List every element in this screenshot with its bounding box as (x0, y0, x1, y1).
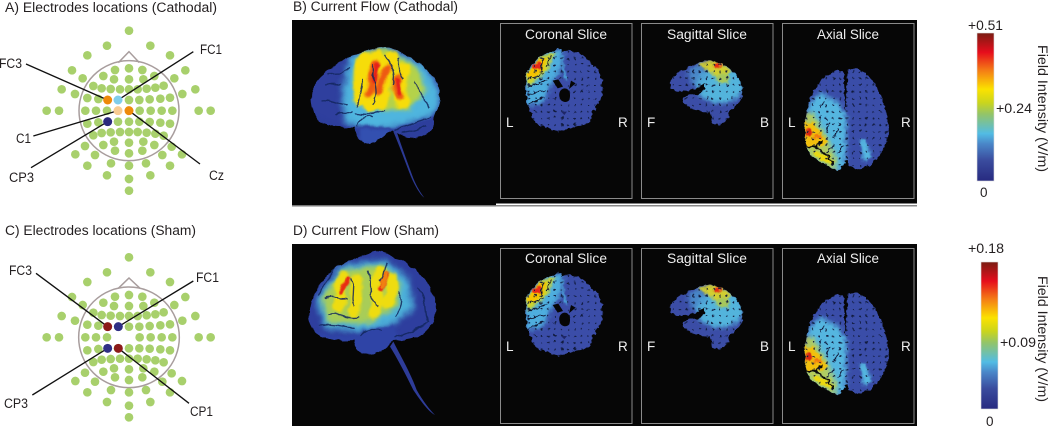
axial slice cathodal (782, 24, 914, 198)
electrode labels (4, 263, 219, 419)
axial slice sham (782, 248, 914, 424)
electrode labels: FC1 (200, 42, 222, 57)
coronal slice cathodal: L (506, 115, 514, 130)
sagittal slice sham: B (760, 339, 769, 354)
sagittal slice cathodal: F (647, 115, 655, 130)
scalp electrodes (42, 26, 215, 195)
sagittal slice cathodal: B (760, 115, 769, 130)
axial slice sham: L (788, 339, 796, 354)
coronal slice cathodal: Coronal Slice (525, 27, 607, 42)
electrode labels: Cz (209, 168, 224, 183)
electrode labels: C1 (16, 131, 31, 146)
stimulating electrodes (103, 95, 133, 126)
panel: current flow sham (292, 244, 917, 426)
head outline (79, 278, 179, 388)
electrode labels: CP1 (190, 404, 213, 419)
brain render cathodal (308, 45, 445, 198)
electrode labels: FC1 (196, 270, 219, 285)
electrode map: cathodal (0, 26, 224, 195)
panel: current flow cathodal (292, 20, 917, 206)
electrode map: sham (4, 253, 219, 422)
colour scale sham: +0.09 (1000, 335, 1036, 350)
coronal slice sham: L (506, 339, 514, 354)
electrode labels: CP3 (4, 396, 28, 411)
sagittal slice sham: Sagittal Slice (667, 251, 747, 266)
colour scale cathodal: +0.51 (968, 18, 1003, 33)
sagittal slice cathodal (642, 24, 773, 198)
stimulating electrodes (103, 322, 123, 353)
colour scale sham (968, 241, 1050, 427)
leader lines (26, 52, 200, 168)
coronal slice sham: Coronal Slice (525, 251, 607, 266)
axial slice cathodal: Axial Slice (817, 27, 879, 42)
sagittal slice cathodal: Sagittal Slice (667, 27, 747, 42)
colour scale sham: +0.18 (968, 241, 1004, 256)
colour scale cathodal: +0.24 (996, 101, 1033, 116)
panel title C: C) Electrodes locations (Sham) (5, 223, 196, 238)
scalp electrodes (42, 253, 215, 422)
colour scale cathodal: 0 (980, 185, 988, 200)
axial slice cathodal: R (901, 115, 911, 130)
panel title D: D) Current Flow (Sham) (293, 223, 439, 238)
coronal slice cathodal (500, 24, 632, 198)
colour scale sham: Field Intensity (V/m) (1035, 276, 1050, 402)
axial slice sham: Axial Slice (817, 251, 879, 266)
leader lines (32, 273, 193, 403)
colour scale cathodal: Field Intensity (V/m) (1035, 45, 1050, 172)
electrode labels (0, 42, 224, 185)
axial slice sham: R (901, 339, 911, 354)
sagittal slice sham: F (647, 339, 655, 354)
panel title A: A) Electrodes locations (Cathodal) (5, 0, 217, 15)
colour scale cathodal (968, 18, 1050, 200)
brain render sham (305, 248, 442, 415)
axial slice cathodal: L (788, 115, 796, 130)
coronal slice sham (500, 248, 632, 424)
sagittal slice sham (642, 248, 773, 424)
coronal slice cathodal: R (618, 115, 628, 130)
electrode labels: CP3 (9, 170, 34, 185)
electrode labels: FC3 (9, 263, 32, 278)
head outline (79, 52, 179, 161)
coronal slice sham: R (618, 339, 628, 354)
